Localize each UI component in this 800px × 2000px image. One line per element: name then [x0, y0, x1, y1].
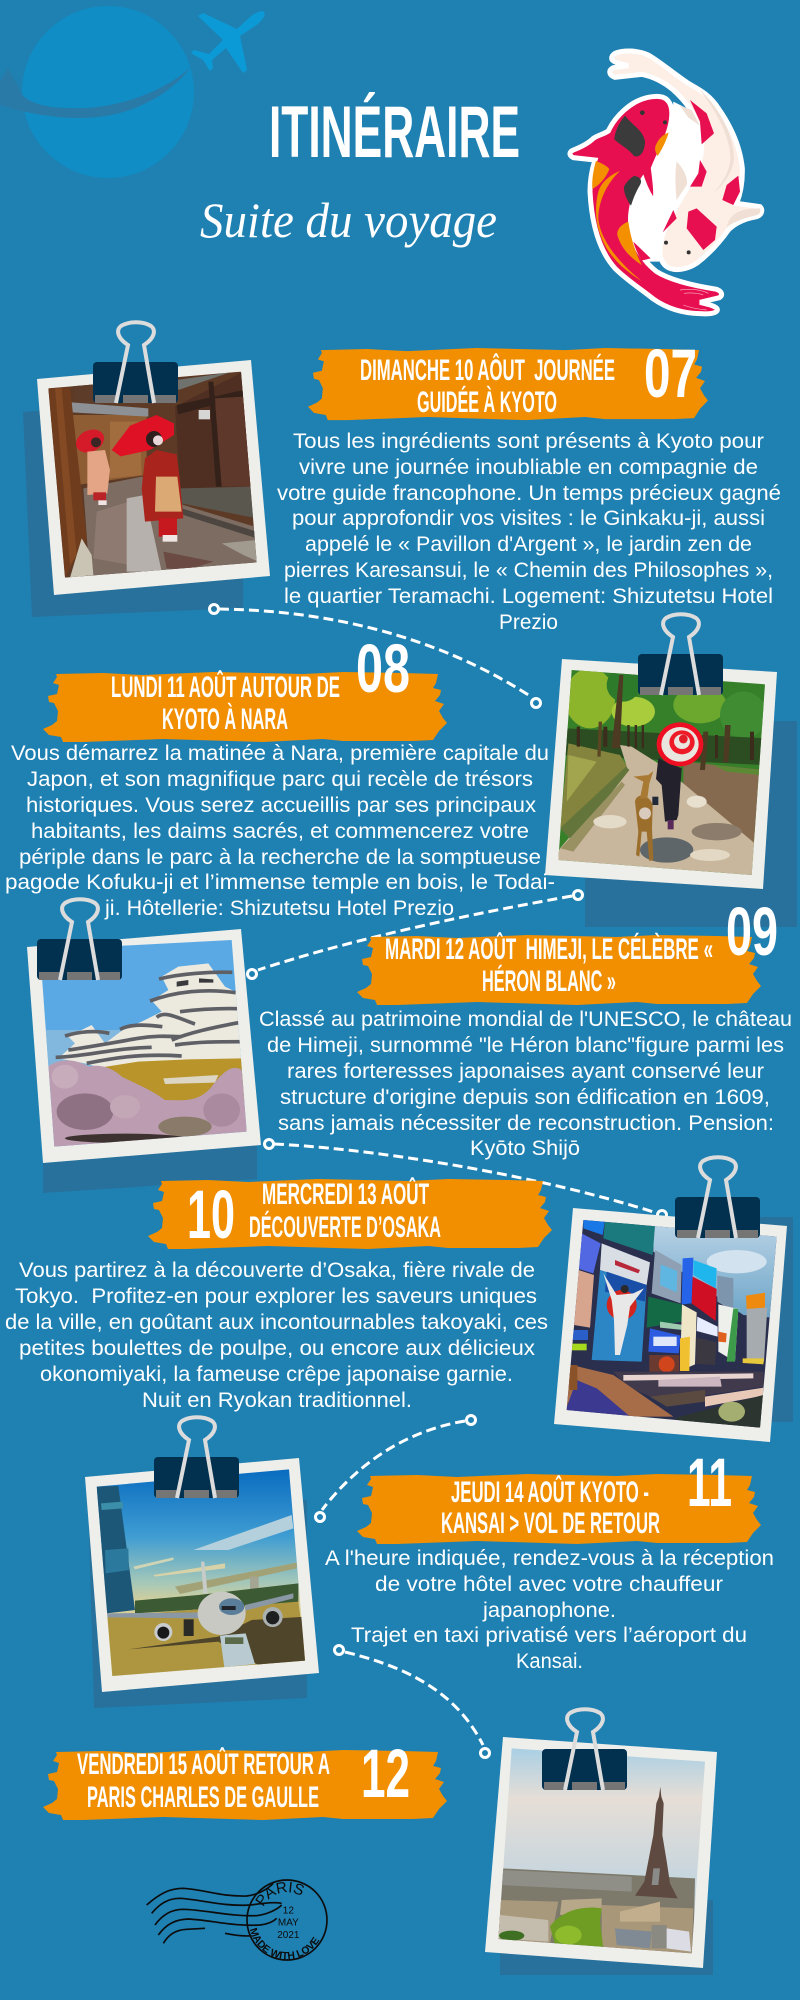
text: day 10 description: Vous partirez à la découverte d’Osaka, fière rivale de [19, 1259, 535, 1282]
photo 2: woman and deer in Nara park [545, 614, 797, 927]
icon: Paris postmark stamp: 2021 [277, 1930, 300, 1941]
banner: day 08: LUNDI 11 AOÛT AUTOUR DE [111, 670, 340, 704]
banner: day 10: DÉCOUVERTE D’OSAKA [249, 1210, 441, 1244]
binder clip [542, 1709, 627, 1790]
icon: Paris postmark stamp [146, 1879, 328, 1961]
binder clip [675, 1157, 760, 1238]
dashed route 10 to 11 [316, 1416, 476, 1522]
text: day 11 description: Trajet en taxi privatisé vers l’aéroport du [351, 1624, 747, 1647]
text: day 07 description [277, 430, 781, 634]
text: day 08 description: Vous démarrez la matinée à Nara, première capitale du [11, 742, 549, 765]
banner: day 10: MERCREDI 13 AOÛT [262, 1177, 429, 1211]
text: day 07 description: votre guide francophone. Un temps précieux gagné [277, 482, 781, 505]
text: day 07 description: vivre une journée inoubliable en compagnie de [299, 456, 758, 479]
text: day 10 description [5, 1259, 548, 1412]
text: day 08 description: habitants, les daims sacrés, et commencerez votre [31, 820, 529, 843]
dashed route 11 to 12 [334, 1646, 490, 1758]
binder clip [154, 1417, 239, 1498]
text: day 07 description: pour approfondir vos visites : le Ginkaku-ji, aussi [292, 507, 765, 530]
cream koi [610, 51, 762, 270]
banner: day 08 [43, 630, 447, 742]
text: day 07 description: appelé le « Pavillon d'Argent », le jardin zen de [305, 533, 752, 556]
text: day 10 description: okonomiyaki, la fameuse crêpe japonaise garnie. [40, 1363, 513, 1386]
text: day 09 description: Classé au patrimoine mondial de l'UNESCO, le château [259, 1008, 792, 1031]
banner: day 07: GUIDÉE À KYOTO [417, 385, 557, 419]
text: day 08 description: ji. Hôtellerie: Shizutetsu Hotel Prezio [104, 897, 454, 920]
photo 1: geishas in Kyoto alley [23, 322, 270, 617]
day number: 10 [187, 1176, 235, 1253]
photo 6: Paris with Eiffel Tower [485, 1709, 717, 1975]
text: day 08 description: historiques. Vous serez accueillis par ses principaux [26, 794, 537, 817]
banner: day 12 [43, 1735, 447, 1820]
banner: day 12: VENDREDI 15 AOÛT RETOUR A [77, 1747, 330, 1781]
text: day 07 description: pierres Karesansui, le « Chemin des Philosophes », [284, 559, 773, 582]
text: day 09 description: Kyōto Shijō [470, 1137, 580, 1160]
icon: planet with ring [0, 6, 194, 178]
photo 3: Himeji castle [27, 899, 261, 1193]
dashed route 07 to 08 [210, 604, 540, 708]
day number: 08 [356, 630, 410, 707]
day number: 07 [644, 335, 697, 412]
photo 5: airplane at Kansai airport [85, 1417, 319, 1708]
text: day 07 description: le quartier Teramachi. Logement: Shizutetsu Hotel [284, 585, 773, 608]
banner: day 07 [308, 335, 708, 420]
text: day 10 description: de la ville, en goûtant aux incontournables takoyaki, ces [5, 1311, 548, 1334]
title: ITINÉRAIRE [269, 92, 520, 173]
banner: day 12: PARIS CHARLES DE GAULLE [87, 1781, 319, 1814]
text: day 10 description: Nuit en Ryokan traditionnel. [142, 1389, 412, 1412]
subtitle: Suite du voyage [200, 192, 497, 248]
icon: Paris postmark stamp: MAY [278, 1917, 299, 1928]
text: day 09 description: structure d'origine depuis son édification en 1609, [280, 1086, 770, 1109]
red koi [570, 96, 722, 314]
text: day 08 description: Japon, et son magnifique parc qui recèle de trésors [27, 768, 533, 791]
text: day 11 description: japanophone. [482, 1599, 616, 1622]
text: day 10 description: petites boulettes de poulpe, ou encore aux délicieux [19, 1337, 536, 1360]
text: day 09 description: de Himeji, surnommé "le Héron blanc"figure parmi les [267, 1034, 784, 1057]
text: day 07 description: Tous les ingrédients sont présents à Kyoto pour [293, 430, 764, 453]
banner: day 11 [357, 1444, 761, 1544]
text: day 11 description: de votre hôtel avec votre chauffeur [375, 1573, 723, 1596]
icon: koi fish pair [570, 51, 762, 314]
photo 4: Osaka Dotonbori [554, 1157, 793, 1442]
text: day 10 description: Tokyo. Profitez-en pour explorer les saveurs uniques [15, 1285, 537, 1308]
text: day 11 description: A l'heure indiquée, rendez-vous à la réception [325, 1547, 774, 1570]
text: day 09 description: sans jamais nécessiter de reconstruction. Pension: [278, 1112, 774, 1135]
text: day 08 description: périple dans le parc à la recherche de la somptueuse [19, 846, 541, 869]
icon: Paris postmark stamp: 12 [283, 1905, 294, 1916]
banner: day 08: KYOTO À NARA [162, 702, 288, 736]
binder clip [638, 614, 723, 695]
banner: day 09: HÉRON BLANC » [482, 964, 616, 998]
binder clip [93, 322, 178, 403]
day number: 12 [361, 1735, 410, 1812]
icon: airplane [191, 11, 265, 73]
text: day 11 description: Kansai. [516, 1650, 583, 1673]
text: day 09 description: rares forteresses japonaises ayant conservé leur [287, 1060, 764, 1083]
icon: Paris postmark stamp: MADE WITH LOVE [250, 1928, 320, 1959]
icon: Paris postmark stamp: PARIS [255, 1882, 304, 1906]
banner: day 09 [357, 893, 778, 1005]
text: day 11 description [325, 1547, 774, 1673]
banner: day 10 [148, 1176, 552, 1253]
text: day 08 description: pagode Kofuku-ji et l’immense temple en bois, le Todai- [5, 871, 555, 894]
dashed route 09 to 10 [264, 1140, 666, 1220]
text: day 09 description [259, 1008, 792, 1160]
text: day 08 description [5, 742, 555, 920]
day number: 11 [687, 1444, 732, 1521]
dashed route 08 to 09 [248, 890, 582, 978]
binder clip [37, 899, 122, 980]
text: day 07 description: Prezio [499, 611, 558, 634]
banner: day 11: JEUDI 14 AOÛT KYOTO - [451, 1475, 649, 1509]
